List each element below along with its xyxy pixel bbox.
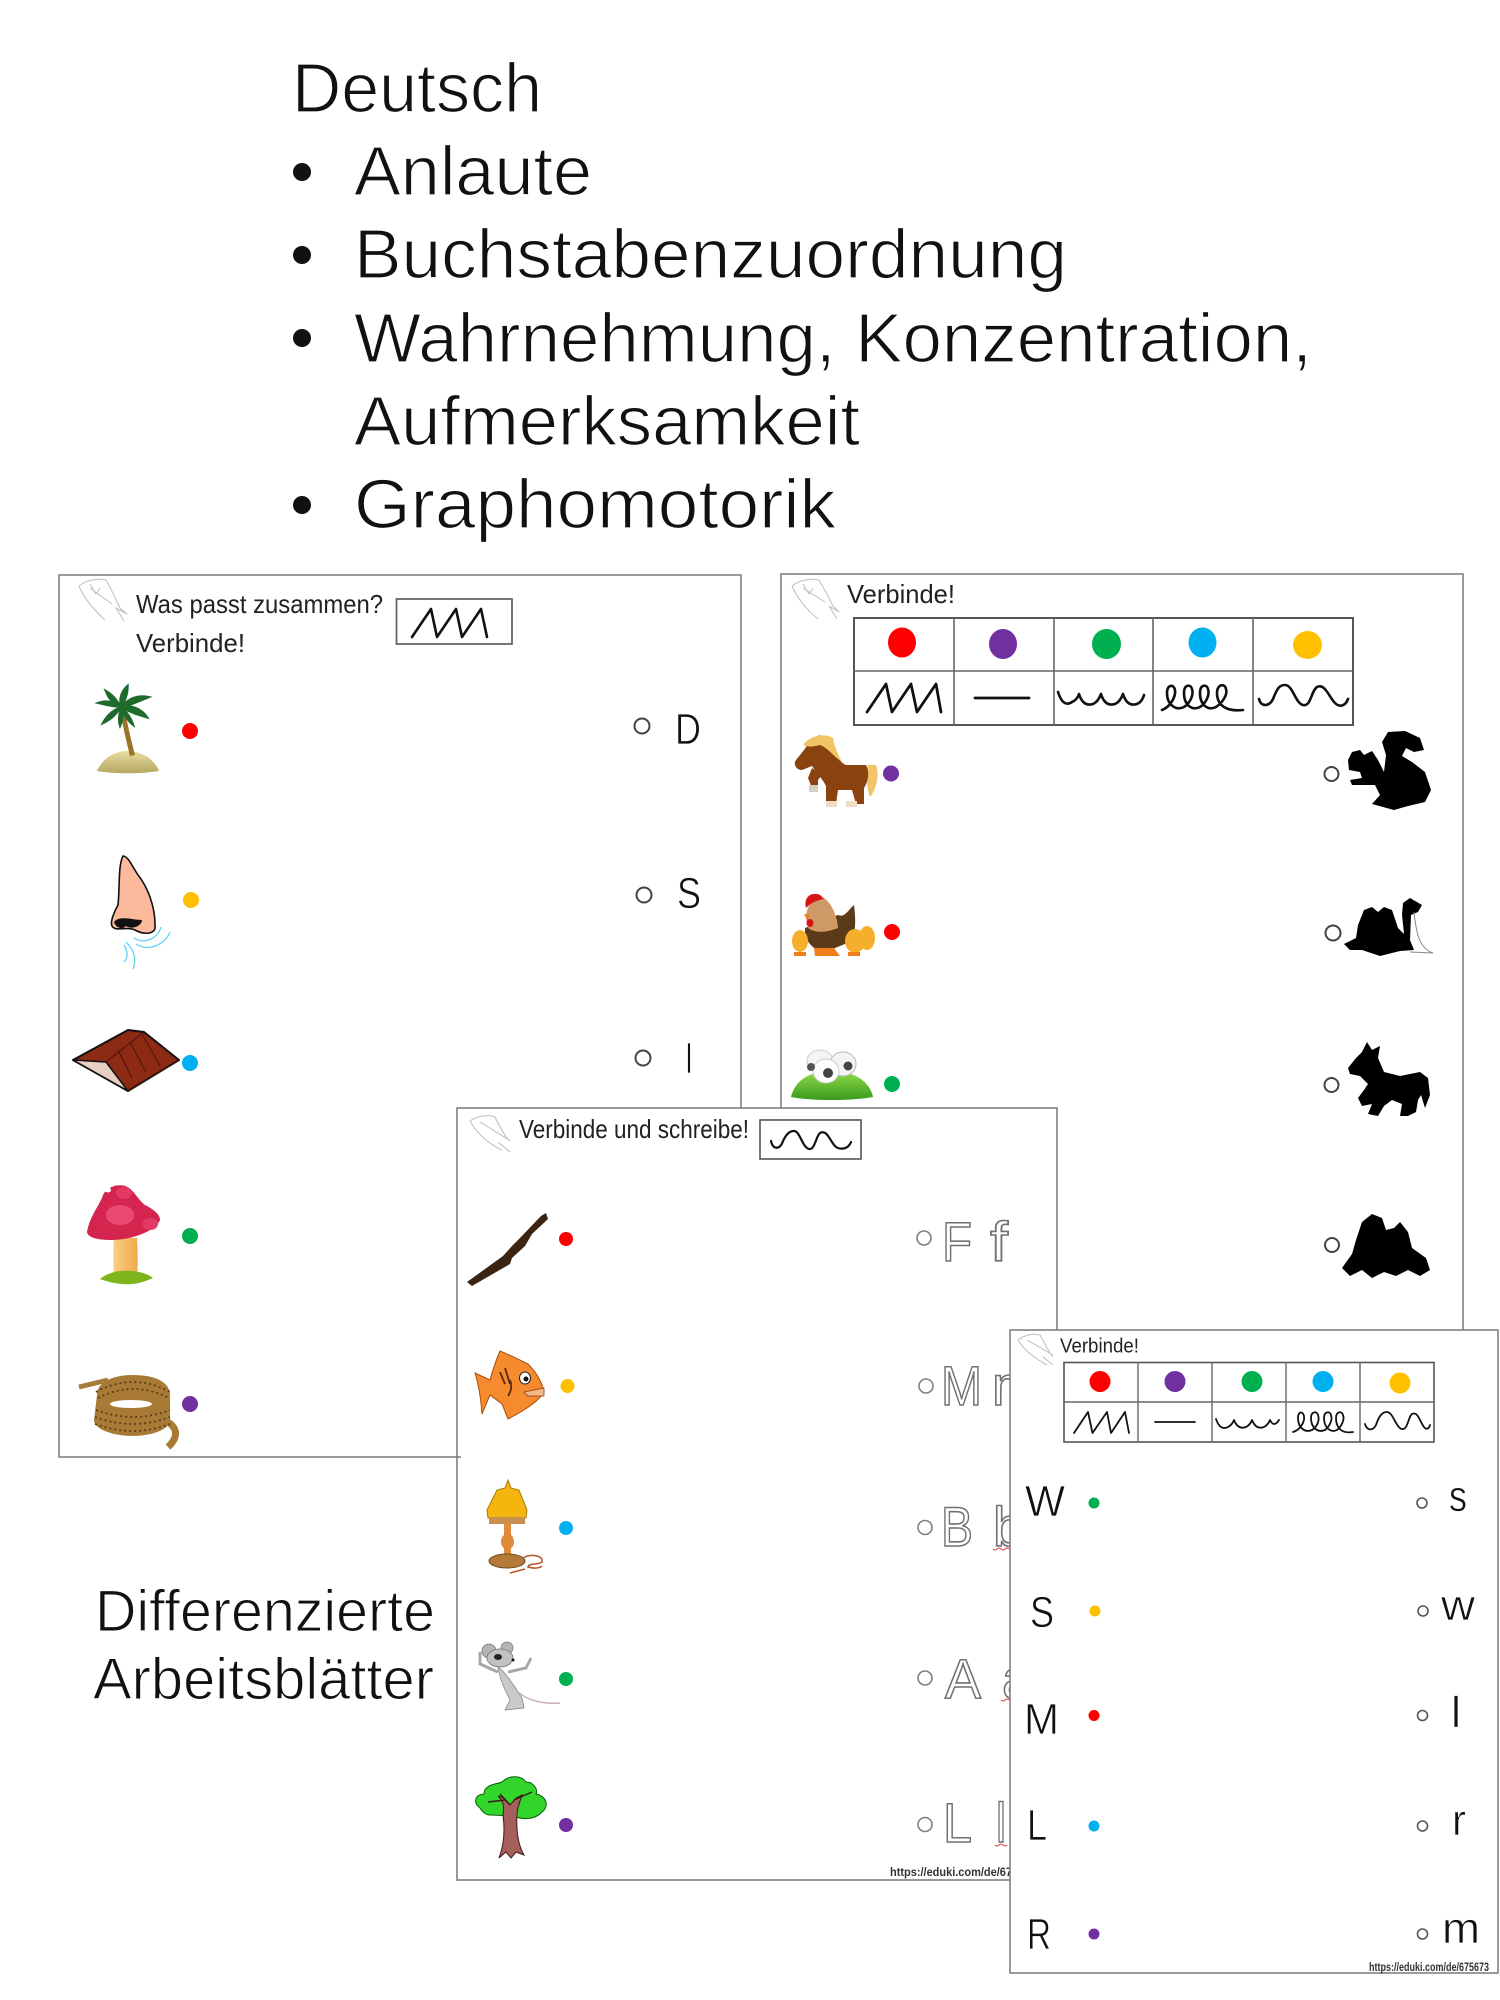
bullet list: Wahrnehmung, Konzentration, [354, 299, 1312, 377]
target: A a: a [1002, 1647, 1034, 1710]
row: R to m [1027, 1904, 1480, 1959]
target: squirrel silhouette [1324, 731, 1431, 810]
dot: red [884, 924, 900, 940]
row: R to m: m [1442, 1904, 1480, 1953]
target: F f: f [990, 1210, 1009, 1273]
worksheet heading: Was passt zusammen? [136, 589, 383, 619]
target: I [636, 1034, 693, 1083]
target: I: I [685, 1034, 693, 1083]
panel: worksheet 3 letters to write [457, 1108, 1057, 1880]
row: L to r [1027, 1796, 1466, 1850]
heading: Deutsch: Deutsch [292, 49, 542, 127]
target: S [636, 869, 701, 918]
target: S: S [677, 869, 701, 918]
target: B b: b [993, 1495, 1024, 1558]
icon: writing hand [470, 1116, 510, 1152]
icon: coiled rope [79, 1375, 176, 1447]
worksheet heading: Verbinde! [136, 628, 245, 658]
legend table: colours and strokes [1064, 1362, 1434, 1442]
row: W to s: s [1449, 1472, 1467, 1521]
icon: writing hand [79, 579, 127, 621]
dot: red [182, 723, 198, 739]
target: L l [918, 1791, 1007, 1854]
caption: Differenzierte Arbeitsblätter: Differenzierte [95, 1579, 435, 1644]
stroke pattern box: zigzag [396, 599, 512, 644]
target: D: D [675, 705, 701, 754]
dot: blue [182, 1055, 198, 1071]
icon: eyes on green mound [791, 1050, 873, 1100]
icon: nose [111, 856, 170, 969]
row: L to r: L [1027, 1801, 1047, 1850]
icon: tree [476, 1777, 546, 1858]
icon: stick [467, 1213, 548, 1286]
target: B b: B [941, 1495, 973, 1558]
stroke pattern box: wave [760, 1120, 861, 1159]
bullet list: Anlaute [354, 132, 592, 210]
row: S to w: w [1440, 1581, 1475, 1630]
row: S to w [1030, 1581, 1475, 1637]
target: B b [918, 1495, 1024, 1558]
dot: red [559, 1232, 573, 1246]
icon: hen with chicks [792, 894, 875, 956]
icon: horse [795, 735, 878, 807]
dot: yellow [183, 892, 199, 908]
row: R to m: R [1027, 1910, 1051, 1959]
worksheet heading: Verbinde! [847, 579, 955, 609]
worksheet heading [136, 589, 383, 658]
icon: palm island [97, 685, 159, 773]
row: M to l: l [1451, 1688, 1461, 1737]
caption: Differenzierte Arbeitsblätter [93, 1579, 435, 1712]
bullet list: Graphomotorik [354, 465, 837, 543]
icon: mushroom [87, 1185, 160, 1284]
bullet list [293, 132, 1312, 543]
target: L l: L [943, 1791, 972, 1854]
row: M to l [1024, 1688, 1461, 1744]
icon: roof [73, 1030, 179, 1091]
dot: purple [883, 766, 899, 782]
icon: table lamp [487, 1480, 542, 1573]
target: M m: M [941, 1354, 982, 1417]
panel: worksheet 2 animal shadows [781, 574, 1463, 1334]
dot: green [182, 1228, 198, 1244]
bullet list: Aufmerksamkeit [354, 382, 860, 460]
legend table: colours and strokes [854, 618, 1353, 725]
row: M to l: M [1024, 1695, 1059, 1744]
row: S to w: S [1030, 1588, 1054, 1637]
dot: purple [182, 1396, 198, 1412]
dot: blue [559, 1521, 573, 1535]
target: M m: m [992, 1354, 1039, 1417]
icon: writing hand [792, 579, 839, 619]
row: L to r: r [1452, 1796, 1466, 1845]
target: A a: A [945, 1647, 982, 1710]
icon: grey mouse [480, 1642, 560, 1710]
target: F f: F [942, 1210, 972, 1273]
dot: green [559, 1672, 573, 1686]
icon: writing hand [1018, 1334, 1053, 1365]
target: M m [919, 1354, 1039, 1417]
target: F f [917, 1210, 1009, 1273]
target: D [634, 705, 701, 754]
title block [292, 49, 1312, 543]
worksheet heading: Verbinde und schreibe! [519, 1114, 749, 1144]
panel: worksheet 4 upper and lower case [1010, 1330, 1498, 1974]
target: hen silhouette [1325, 1214, 1430, 1278]
source url: https://eduki.com/de/67 [890, 1867, 1012, 1879]
target: L l: l [996, 1791, 1006, 1854]
caption: Differenzierte Arbeitsblätter: Arbeitsblätter [93, 1647, 434, 1712]
target: camel silhouette [1326, 898, 1433, 956]
icon: fish [475, 1351, 544, 1419]
target: horse silhouette [1324, 1042, 1430, 1116]
row: W to s [1025, 1472, 1467, 1526]
worksheet heading: Verbinde! [1060, 1336, 1139, 1358]
row: W to s: W [1025, 1477, 1065, 1526]
dot: yellow [560, 1379, 574, 1393]
bullet list: Buchstabenzuordnung [354, 215, 1067, 293]
dot: purple [559, 1818, 573, 1832]
panel: worksheet 1 Anlaute [59, 575, 741, 1457]
target: A a [918, 1647, 1034, 1710]
dot: green [884, 1076, 900, 1092]
